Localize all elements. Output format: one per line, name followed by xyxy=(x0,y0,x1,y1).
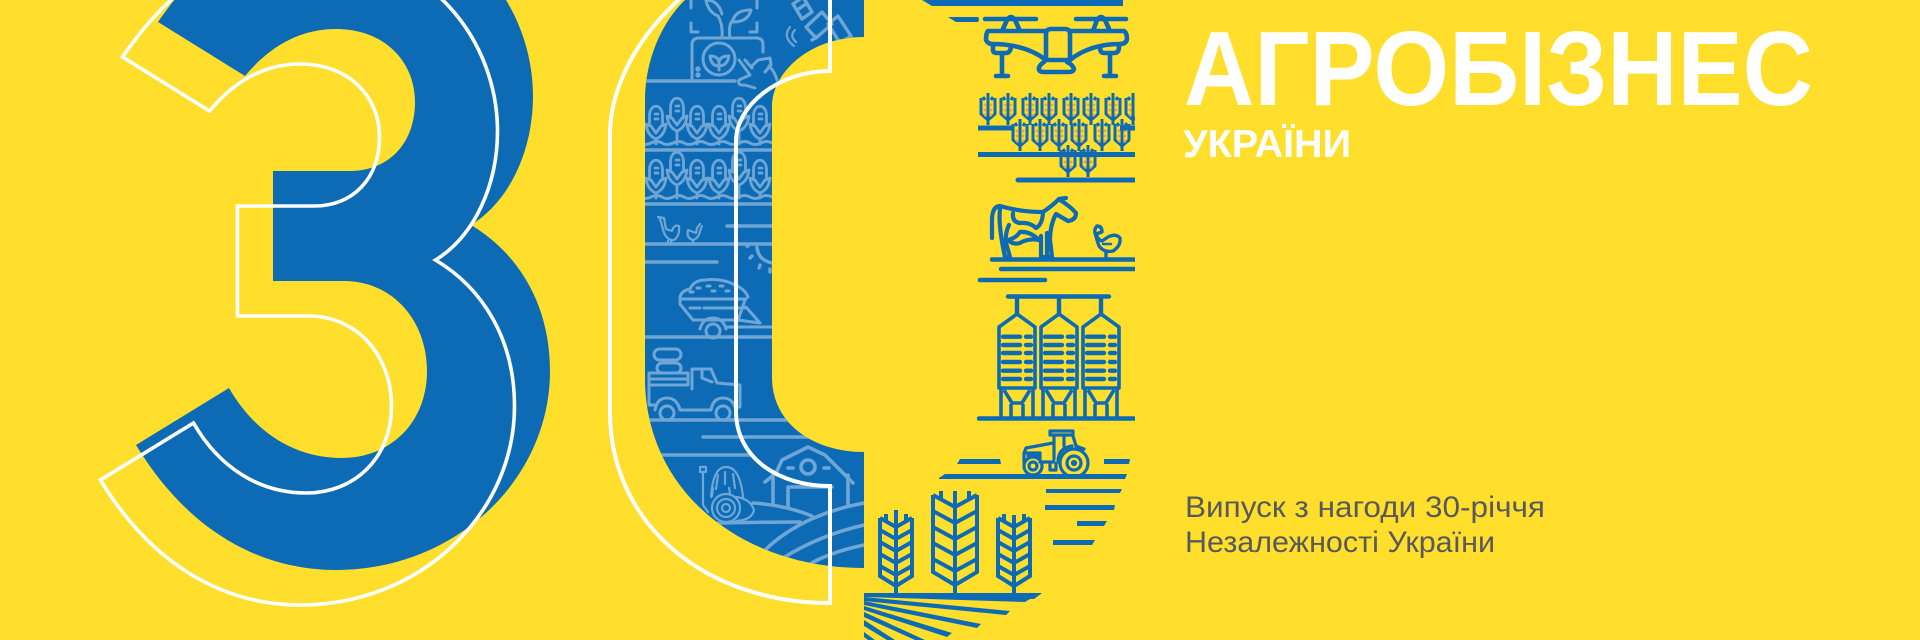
field with furrows xyxy=(864,593,1042,640)
digit 0: left half, blue fill xyxy=(645,0,864,568)
icon: satellite xyxy=(787,0,851,46)
icon: drone xyxy=(985,17,1127,76)
subtitle: УКРАЇНИ xyxy=(1183,123,1351,166)
icon: silos xyxy=(979,314,1134,418)
digit 3: blue fill xyxy=(136,0,550,570)
drone side dash xyxy=(948,17,979,22)
icon: truck with hay bales xyxy=(649,349,740,420)
tractor road lines xyxy=(939,459,1130,545)
caption xyxy=(1185,491,1545,559)
field lines xyxy=(640,226,815,455)
icon: grain trailer xyxy=(680,280,775,338)
title: АГРОБІЗНЕС xyxy=(1184,10,1813,128)
corn row 2 xyxy=(640,152,775,204)
caption: Незалежності України xyxy=(1185,526,1495,559)
caption: Випуск з нагоди 30-річчя xyxy=(1185,491,1545,524)
icon: barn xyxy=(716,445,864,564)
icon: silo pipeline xyxy=(1008,296,1109,314)
corn row 1 xyxy=(640,98,775,150)
cow ground lines xyxy=(980,260,1135,280)
icon: chickens xyxy=(658,217,702,243)
icon: hen xyxy=(1095,226,1120,258)
digit 0: white offset outline xyxy=(610,0,830,603)
top strip line xyxy=(922,0,1123,6)
pale agriculture illustrations inside zero xyxy=(640,0,864,565)
icon: large wheat ears xyxy=(880,491,1030,595)
icon: sun xyxy=(747,246,772,272)
icon: hay roll and stack xyxy=(700,467,754,522)
icon: tablet with sprout and hand xyxy=(640,0,777,88)
digit 3: white offset outline xyxy=(100,0,514,605)
icon: cow xyxy=(992,198,1076,257)
icon: tractor xyxy=(1024,431,1088,477)
wheat rows xyxy=(978,93,1140,180)
icons on yellow half of zero xyxy=(864,0,1140,640)
